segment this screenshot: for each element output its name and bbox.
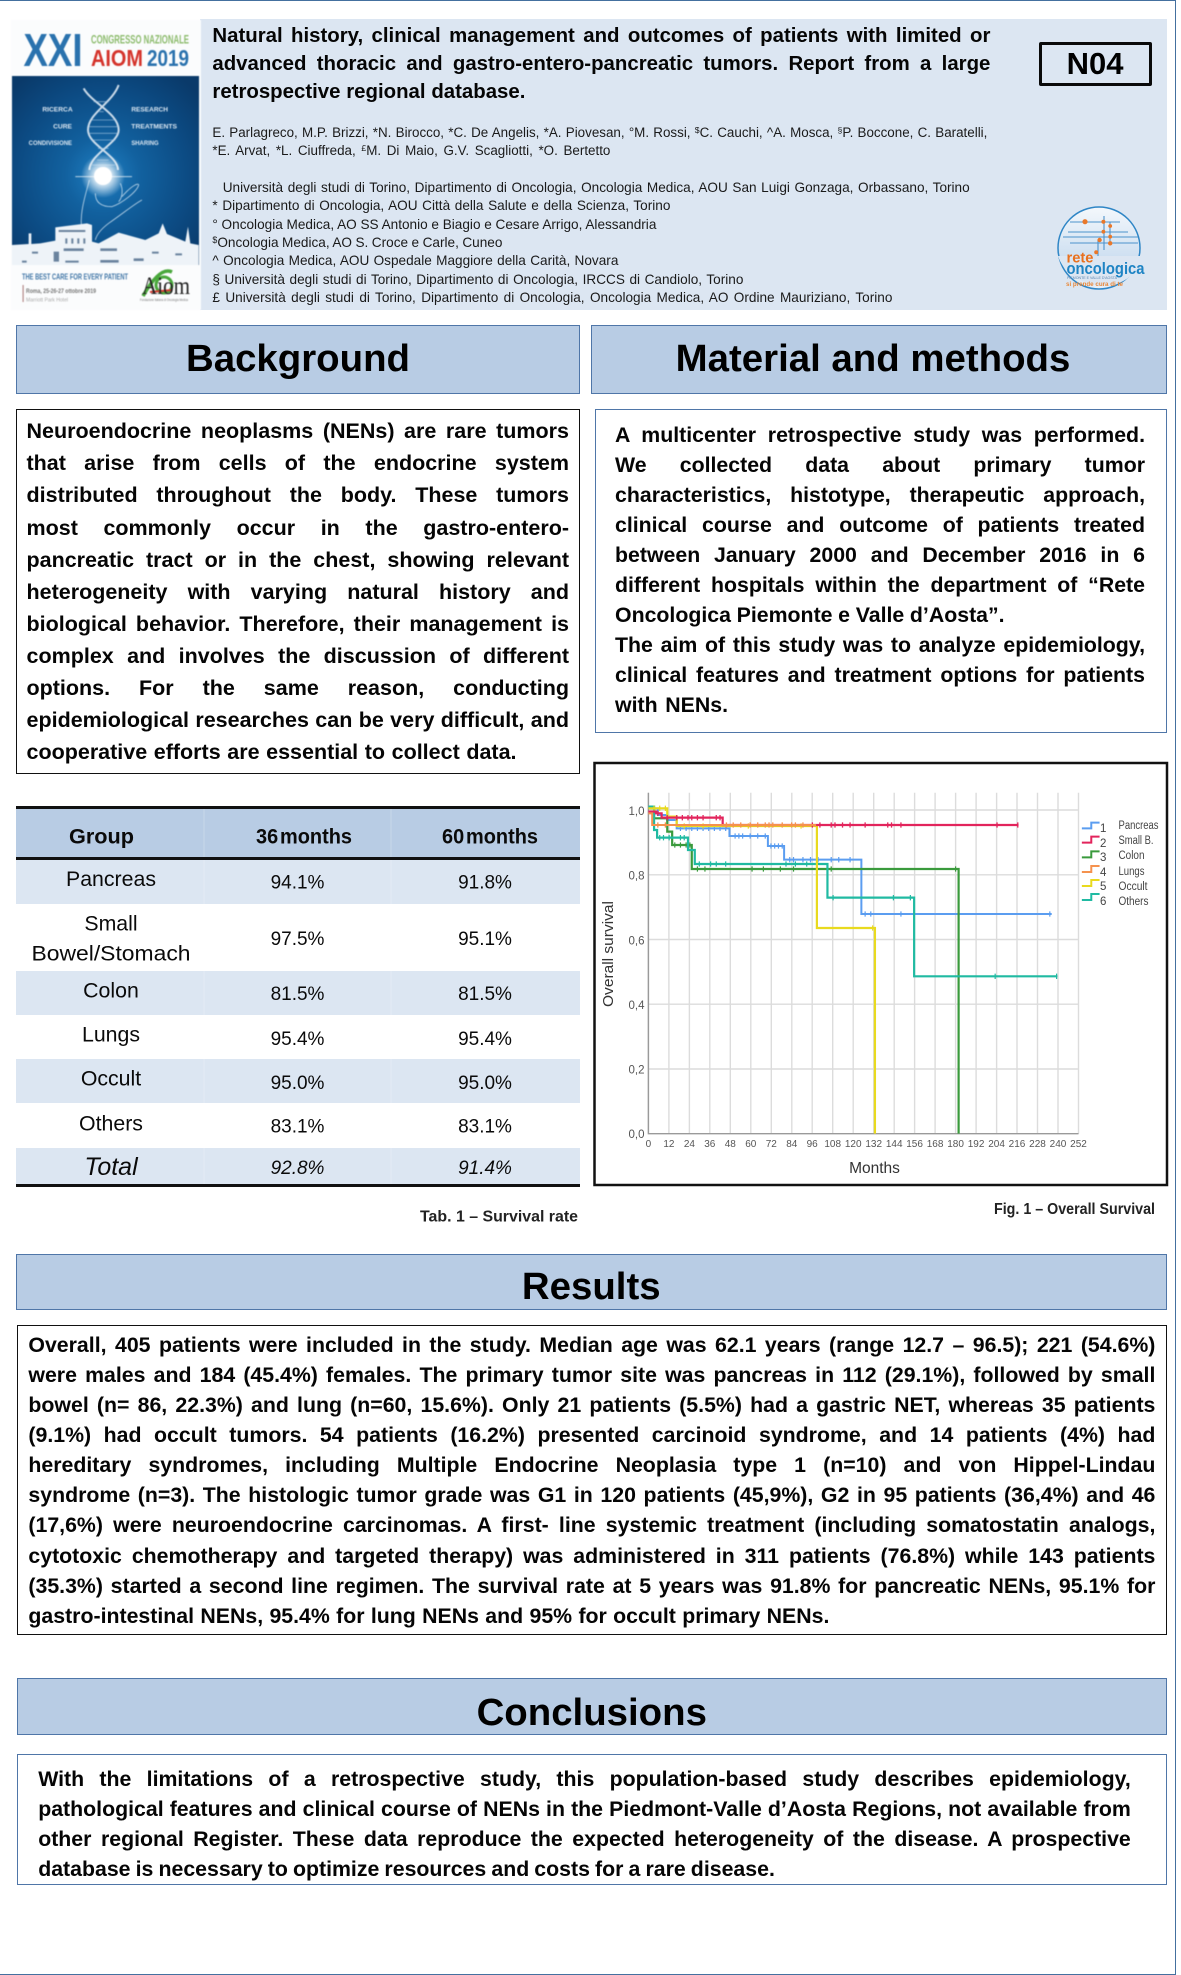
affiliations xyxy=(212,180,970,305)
table values: 95.0% xyxy=(271,1073,325,1094)
table values: 92.8% xyxy=(271,1158,325,1179)
table: survival rate xyxy=(16,806,580,1187)
methods paragraph: clinical course and outcome of patients treated xyxy=(615,513,1145,537)
title xyxy=(212,24,990,103)
x axis labels: 204 xyxy=(988,1139,1005,1150)
conclusions paragraph: With the limitations of a retrospective study, this population-based study describes epidemiology, xyxy=(38,1767,1131,1791)
table values: 91.4% xyxy=(458,1158,512,1179)
authors xyxy=(212,124,987,158)
x axis labels: 96 xyxy=(807,1139,818,1150)
blue panel artwork: RESEARCH xyxy=(131,107,168,114)
curve: others xyxy=(648,807,1057,979)
x axis labels: 108 xyxy=(824,1139,841,1150)
authors: *E. Arvat, *L. Ciuffreda, £M. Di Maio, G.V. Scagliotti, *O. Bertetto xyxy=(212,143,610,158)
methods paragraph: We collected data about primary tumor xyxy=(615,453,1145,477)
x axis labels: 48 xyxy=(725,1139,736,1150)
poster code N04: N04 xyxy=(1067,46,1123,80)
table values: 91.8% xyxy=(458,873,512,894)
congress title: XXI xyxy=(24,24,82,76)
curve: colon xyxy=(648,808,959,1134)
methods paragraph: with NENs. xyxy=(615,693,728,717)
y axis labels: 0,0 xyxy=(628,1129,644,1141)
chart legend: 6 xyxy=(1100,896,1106,908)
table values: 94.1% xyxy=(271,873,325,894)
blue panel artwork: CURE xyxy=(53,123,73,130)
background paragraph: that arise from cells of the endocrine system xyxy=(26,451,569,475)
background paragraph: Neuroendocrine neoplasms (NENs) are rare tumors xyxy=(26,419,569,443)
x axis labels: 240 xyxy=(1050,1139,1067,1150)
chart legend: Occult xyxy=(1118,881,1148,893)
background paragraph: epidemiological researches can be very difficult, and xyxy=(26,708,569,732)
blue panel artwork xyxy=(12,76,199,265)
results paragraph: were males and 184 (45.4%) females. The primary tumor site was pancreas in 112 (29.1%), followed by small xyxy=(28,1363,1155,1387)
results paragraph xyxy=(28,1333,1156,1628)
curve: pancreas xyxy=(648,808,1052,917)
icon: rete oncologica logo: oncologica xyxy=(1066,260,1145,278)
icon: rete oncologica logo: PIEMONTE E VALLE D'AOSTA xyxy=(1067,276,1118,280)
icon: rete oncologica logo: si prende cura di te xyxy=(1066,281,1123,288)
x axis labels: 72 xyxy=(766,1139,777,1150)
y axis labels: 1,0 xyxy=(628,806,644,818)
congress title xyxy=(24,24,189,76)
methods paragraph: Oncologica Piemonte e Valle d’Aosta”. xyxy=(615,603,1005,627)
chart legend: Small B. xyxy=(1118,835,1154,847)
results paragraph: (9.1%) had occult tumors. 54 patients (16.2%) presented carcinoid syndrome, and 14 patients (4%) had xyxy=(28,1423,1155,1447)
background paragraph: cooperative efforts are essential to collect data. xyxy=(26,740,516,764)
panel: material and methods text xyxy=(594,409,1166,732)
y axis labels: 0,6 xyxy=(628,936,644,948)
congress footer: Marriott Park Hotel xyxy=(26,298,68,304)
congress footer: Roma, 25-26-27 ottobre 2019 xyxy=(26,288,96,295)
methods paragraph: characteristics, histotype, therapeutic approach, xyxy=(615,483,1145,507)
poster code N04 xyxy=(1038,42,1152,86)
x axis labels: 168 xyxy=(927,1139,944,1150)
chart: overall survival Kaplan-Meier xyxy=(593,762,1168,1186)
x axis labels: 156 xyxy=(906,1139,923,1150)
y axis labels xyxy=(628,806,645,1141)
blue panel artwork: SHARING xyxy=(131,140,159,147)
chart legend: Colon xyxy=(1118,850,1144,862)
x axis labels: 192 xyxy=(968,1139,985,1150)
affiliations: £ Università degli studi di Torino, Dipartimento di Oncologia, Oncologia Medica, AO Ordine Mauriziano, Torino xyxy=(212,290,892,305)
conclusions paragraph: database is necessary to optimize resources and costs for a rare disease. xyxy=(38,1857,775,1881)
conclusions paragraph: pathological features and clinical course of NENs in the Piedmont-Valle d’Aosta Regions, not available from xyxy=(38,1797,1131,1821)
congress footer: Aiom xyxy=(142,273,190,300)
results paragraph: Overall, 405 patients were included in the study. Median age was 62.1 years (range 12.7 – 96.5); 221 (54.6%) xyxy=(28,1333,1155,1357)
heading: Results xyxy=(16,1254,1166,1310)
background paragraph xyxy=(26,419,569,764)
curve: lungs xyxy=(648,813,816,828)
table header row: 60 months xyxy=(442,824,538,848)
x axis labels: 144 xyxy=(886,1139,903,1150)
blue panel artwork: RICERCA xyxy=(42,107,73,114)
table values: 95.4% xyxy=(458,1029,512,1050)
title: retrospective regional database. xyxy=(212,81,525,103)
affiliations: Università degli studi di Torino, Dipartimento di Oncologia, Oncologia Medica, AOU San Luigi Gonzaga, Orbassano, Torino xyxy=(223,180,970,195)
background paragraph: complex and involves the discussion of different xyxy=(26,644,569,668)
chart legend: 3 xyxy=(1100,852,1106,864)
table group names xyxy=(32,867,190,1181)
conclusions paragraph xyxy=(38,1767,1131,1881)
table group names: Lungs xyxy=(82,1023,140,1047)
table group names: Others xyxy=(79,1112,143,1136)
x axis labels: 228 xyxy=(1029,1139,1046,1150)
x axis labels: 84 xyxy=(786,1139,798,1150)
methods paragraph: between January 2000 and December 2016 in 6 xyxy=(615,543,1145,567)
x axis labels: 252 xyxy=(1070,1139,1087,1150)
skyline xyxy=(12,223,199,265)
results paragraph: hereditary syndromes, including Multiple Endocrine Neoplasia type 1 (n=10) and von Hippel-Lindau xyxy=(28,1453,1155,1477)
congress title: AIOM xyxy=(91,45,143,71)
authors: E. Parlagreco, M.P. Brizzi, *N. Birocco, *C. De Angelis, *A. Piovesan, °M. Rossi, $C. Cauchi, ^A. Mosca, §P. Boccone, C. Baratelli, xyxy=(212,124,987,140)
affiliations: ^ Oncologia Medica, AOU Ospedale Maggiore della Carità, Novara xyxy=(212,253,618,268)
curve: small bowel xyxy=(648,811,1019,828)
icon: rete oncologica logo: rete xyxy=(1066,250,1094,266)
chart legend: Others xyxy=(1118,896,1149,908)
congress footer: THE BEST CARE FOR EVERY PATIENT xyxy=(22,272,129,282)
results paragraph: cytotoxic chemotherapy and targeted therapy) was administered in 311 patients (76.8%) while 143 patients xyxy=(28,1544,1155,1568)
table group names: Small xyxy=(84,912,138,936)
table group names: Bowel/Stomach xyxy=(32,942,190,966)
x axis labels: 12 xyxy=(663,1139,675,1150)
heading: Background: Background xyxy=(186,336,410,380)
chart legend: 2 xyxy=(1100,838,1106,850)
methods paragraph: A multicenter retrospective study was performed. xyxy=(615,423,1145,447)
background paragraph: options. For the same reason, conducting xyxy=(26,676,569,700)
background paragraph: distributed throughout the body. These tumors xyxy=(26,483,569,507)
methods paragraph: different hospitals within the department of “Rete xyxy=(615,573,1145,597)
title: advanced thoracic and gastro-entero-pancreatic tumors. Report from a large xyxy=(212,53,990,75)
y axis labels: 0,4 xyxy=(628,1000,645,1012)
congress image: XXI AIOM 2019 xyxy=(11,20,202,310)
chart legend: Lungs xyxy=(1118,866,1145,878)
x axis labels: 24 xyxy=(684,1139,695,1150)
affiliations: § Università degli studi di Torino, Dipartimento di Oncologia, IRCCS di Candiolo, Torino xyxy=(212,272,743,287)
table values: 83.1% xyxy=(458,1117,512,1138)
heading: Results: Results xyxy=(522,1265,661,1308)
results paragraph: (17,6%) were neuroendocrine carcinomas. A first- line systemic treatment (including somatostatin analogs, xyxy=(28,1513,1155,1537)
x axis labels: 180 xyxy=(947,1139,964,1150)
y axis labels: 0,8 xyxy=(628,870,644,882)
table group names: Total xyxy=(84,1153,139,1181)
table header row xyxy=(69,824,538,848)
x axis labels: 0 xyxy=(646,1139,652,1150)
y axis labels: 0,2 xyxy=(628,1064,644,1076)
table values: 81.5% xyxy=(271,984,325,1005)
icon: rete oncologica logo xyxy=(1057,206,1145,290)
table values: 95.0% xyxy=(458,1073,512,1094)
table caption: Tab. 1 – Survival rate xyxy=(420,1209,578,1226)
affiliations: ° Oncologia Medica, AO SS Antonio e Biagio e Cesare Arrigo, Alessandria xyxy=(212,217,656,232)
methods paragraph: The aim of this study was to analyze epidemiology, xyxy=(615,633,1145,657)
blue panel artwork: TREATMENTS xyxy=(131,123,178,130)
chart legend: 5 xyxy=(1100,881,1106,893)
x axis title: Months xyxy=(849,1160,900,1177)
table values: 95.1% xyxy=(458,929,512,950)
chart legend: Pancreas xyxy=(1118,820,1159,832)
y axis title: Overall survival xyxy=(600,901,617,1007)
table values: 95.4% xyxy=(271,1029,325,1050)
congress footer xyxy=(22,271,190,304)
chart legend: 1 xyxy=(1100,823,1106,835)
table values: 83.1% xyxy=(271,1117,325,1138)
header panel xyxy=(200,19,1167,310)
background paragraph: most commonly occur in the gastro-entero- xyxy=(26,516,569,540)
chart legend: 4 xyxy=(1100,867,1107,879)
table values: 81.5% xyxy=(458,984,512,1005)
x axis labels: 36 xyxy=(704,1139,716,1150)
heading: Material and methods: Material and methods xyxy=(676,336,1070,380)
panel: conclusions text xyxy=(17,1754,1166,1885)
background paragraph: pancreatic tract or in the chest, showing relevant xyxy=(26,548,569,572)
methods paragraph: clinical features and treatment options for patients xyxy=(615,663,1145,687)
methods paragraph xyxy=(615,423,1145,717)
table group names: Occult xyxy=(81,1066,141,1090)
chart legend xyxy=(1082,820,1159,908)
x axis labels: 120 xyxy=(845,1139,862,1150)
affiliations: $Oncologia Medica, AO S. Croce e Carle, Cuneo xyxy=(212,235,502,250)
heading: Material and methods xyxy=(590,325,1166,394)
congress title: 2019 xyxy=(147,45,189,71)
table header row: 36 months xyxy=(256,824,352,848)
results paragraph: (35.3%) started a second line regimen. The survival rate at 5 years was 91.8% for pancreatic NENs, 95.1% for xyxy=(28,1574,1155,1598)
x axis labels: 60 xyxy=(745,1139,757,1150)
x axis labels: 132 xyxy=(865,1139,882,1150)
title: Natural history, clinical management and outcomes of patients with limited or xyxy=(212,24,990,46)
table group names: Pancreas xyxy=(66,867,156,891)
background paragraph: biological behavior. Therefore, their management is xyxy=(26,612,569,636)
results paragraph: bowel (n= 86, 22.3%) and lung (n=60, 15.6%). Only 21 patients (5.5%) had a gastric NET, whereas 35 patients xyxy=(28,1393,1155,1417)
heading: Conclusions xyxy=(17,1678,1166,1735)
conclusions paragraph: other regional Register. These data reproduce the expected heterogeneity of the disease. A prospective xyxy=(38,1827,1131,1851)
x axis labels: 216 xyxy=(1009,1139,1026,1150)
background paragraph: heterogeneity with varying natural history and xyxy=(26,580,569,604)
blue panel artwork: CONDIVISIONE xyxy=(29,140,72,147)
table values xyxy=(271,873,512,1179)
table group names: Colon xyxy=(83,979,139,1003)
curve: occult xyxy=(648,806,875,1134)
panel: background text xyxy=(16,409,580,774)
results paragraph: syndrome (n=3). The histologic tumor grade was G1 in 120 patients (45,9%), G2 in 95 patients (36,4%) and 46 xyxy=(28,1483,1155,1507)
x axis labels xyxy=(646,1139,1087,1150)
heading: Background xyxy=(16,325,580,394)
heading: Conclusions: Conclusions xyxy=(477,1691,707,1734)
affiliations: * Dipartimento di Oncologia, AOU Città della Salute e della Scienza, Torino xyxy=(212,198,670,213)
survival curves xyxy=(648,806,1057,1134)
results paragraph: gastro-intestinal NENs, 95.4% for lung NENs and 95% for occult primary NENs. xyxy=(28,1604,829,1628)
panel: results text xyxy=(17,1325,1166,1634)
table values: 97.5% xyxy=(271,929,325,950)
table header row: Group xyxy=(69,824,134,848)
